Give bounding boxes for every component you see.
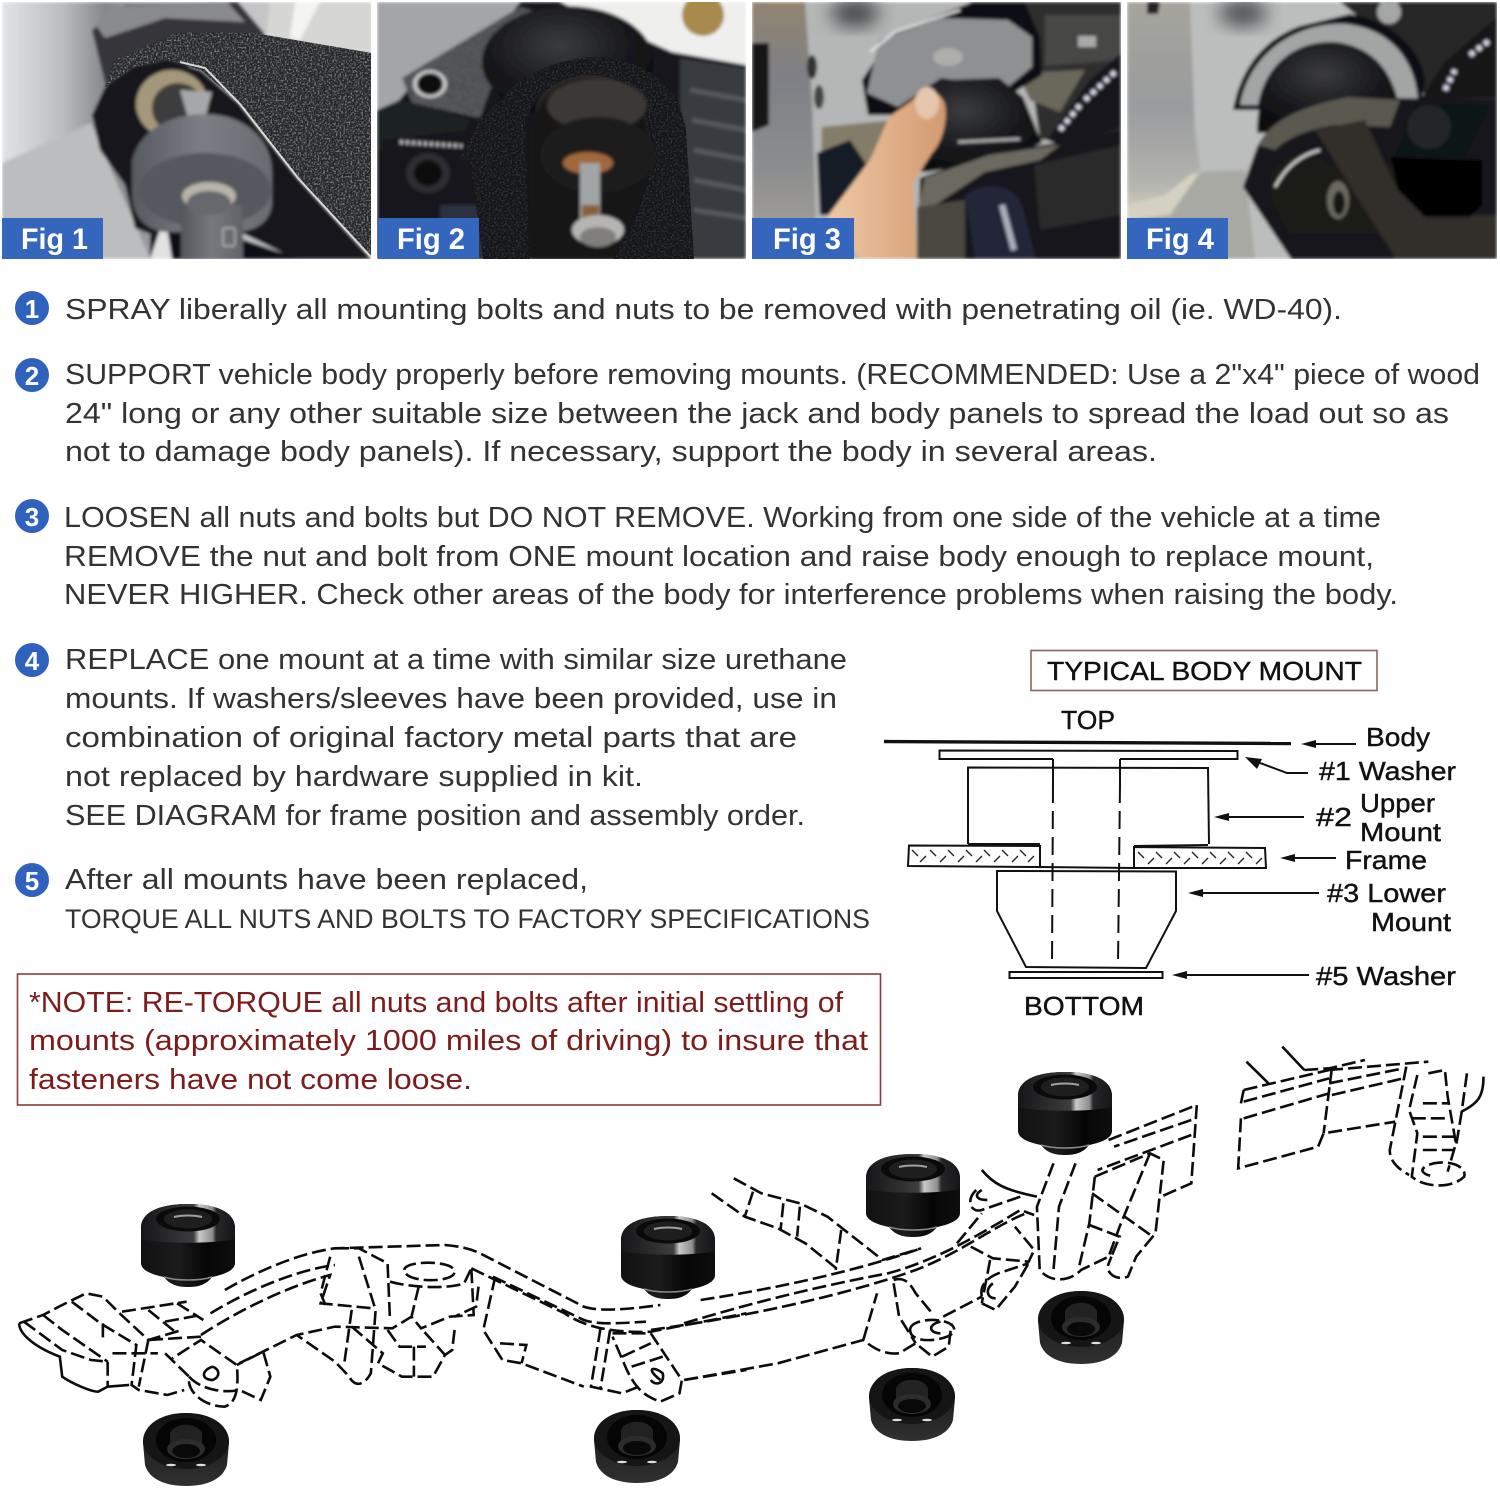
step 3: NEVER HIGHER. Check other areas of the body for interference problems when raising the body. [64, 579, 1398, 611]
label: Fig 2: Fig 2 [397, 223, 465, 256]
label: Fig 4: Fig 4 [1146, 223, 1214, 256]
step 3: LOOSEN all nuts and bolts but DO NOT REMOVE. Working from one side of the vehicle at a time [64, 502, 1381, 534]
step 3: 3 [25, 502, 39, 532]
step 4 [15, 643, 847, 832]
photo: Fig 1 [2, 2, 372, 260]
callout: re-torque note: *NOTE: RE-TORQUE all nuts and bolts after initial settling of [29, 987, 844, 1019]
label: Fig 1: Fig 1 [21, 223, 88, 256]
frame drawing: right section [651, 1047, 1483, 1380]
step 5: After all mounts have been replaced, [65, 864, 588, 896]
callout labels and arrows: #2 [1316, 802, 1352, 832]
step 4: combination of original factory metal parts that are [65, 722, 797, 754]
step 3: REMOVE the nut and bolt from ONE mount location and raise body enough to replace mount, [64, 541, 1374, 573]
photo: Fig 3 [752, 0, 1121, 259]
upper mount 3 [866, 1154, 960, 1237]
upper mount 2 [621, 1216, 715, 1299]
lower mount 4 [1038, 1291, 1124, 1364]
step 4: 4 [25, 646, 40, 676]
step 5 [15, 863, 870, 934]
frame drawing: left section [19, 1245, 746, 1407]
callout labels and arrows: #5 Washer [1316, 961, 1456, 991]
heading: typical body mount [1031, 650, 1377, 690]
step 4: mounts. If washers/sleeves have been provided, use in [65, 683, 837, 715]
step 5: TORQUE ALL NUTS AND BOLTS TO FACTORY SPECIFICATIONS [65, 904, 870, 934]
callout labels and arrows: #1 Washer [1319, 756, 1456, 786]
step 1: 1 [25, 294, 39, 324]
upper mount 1 [141, 1204, 235, 1287]
step 4: REPLACE one mount at a time with similar size urethane [65, 644, 847, 676]
callout: re-torque note: mounts (approximately 1000 miles of driving) to insure that [29, 1025, 868, 1057]
step 1: SPRAY liberally all mounting bolts and nuts to be removed with penetrating oil (ie. WD-40). [65, 294, 1342, 326]
callout labels and arrows: Mount [1371, 907, 1452, 937]
step 2: 2 [25, 361, 39, 391]
text: TOP: TOP [1061, 705, 1115, 735]
text: BOTTOM: BOTTOM [1024, 991, 1144, 1021]
heading: typical body mount: TYPICAL BODY MOUNT [1047, 656, 1362, 686]
lower mount 1 [143, 1413, 229, 1486]
step 2: 24" long or any other suitable size between the jack and body panels to spread the load out so as [65, 398, 1449, 430]
lower mount 3 [869, 1368, 955, 1441]
callout labels and arrows: #3 Lower [1327, 878, 1446, 908]
label: Fig 2 [378, 218, 479, 259]
photo: Fig 4 [1127, 0, 1497, 259]
step 2: SUPPORT vehicle body properly before removing mounts. (RECOMMENDED: Use a 2"x4" piece of wood [65, 359, 1480, 391]
label: Fig 3: Fig 3 [773, 223, 841, 256]
callout labels and arrows: Upper [1360, 788, 1435, 818]
step 4: SEE DIAGRAM for frame position and assembly order. [65, 800, 805, 832]
step 2: not to damage body panels). If necessary, support the body in several areas. [65, 436, 1157, 468]
step 5: 5 [25, 866, 39, 896]
label: Fig 1 [2, 218, 103, 259]
step 3 [15, 499, 1398, 611]
callout labels and arrows: Frame [1345, 845, 1427, 875]
callout: re-torque note [18, 974, 880, 1105]
step 4: not replaced by hardware supplied in kit. [65, 761, 643, 793]
callout: re-torque note: fasteners have not come loose. [29, 1064, 472, 1096]
callout labels and arrows [1172, 722, 1456, 991]
label: Fig 3 [752, 218, 854, 259]
diagram: body mount cross-section [884, 742, 1291, 978]
lower mount 2 [594, 1410, 680, 1483]
upper mount 4 [1018, 1072, 1112, 1155]
step 2 [15, 358, 1480, 468]
callout labels and arrows: Mount [1360, 817, 1442, 847]
callout labels and arrows: Body [1366, 722, 1430, 752]
label: Fig 4 [1127, 218, 1228, 259]
photo: Fig 2 [377, 0, 746, 260]
